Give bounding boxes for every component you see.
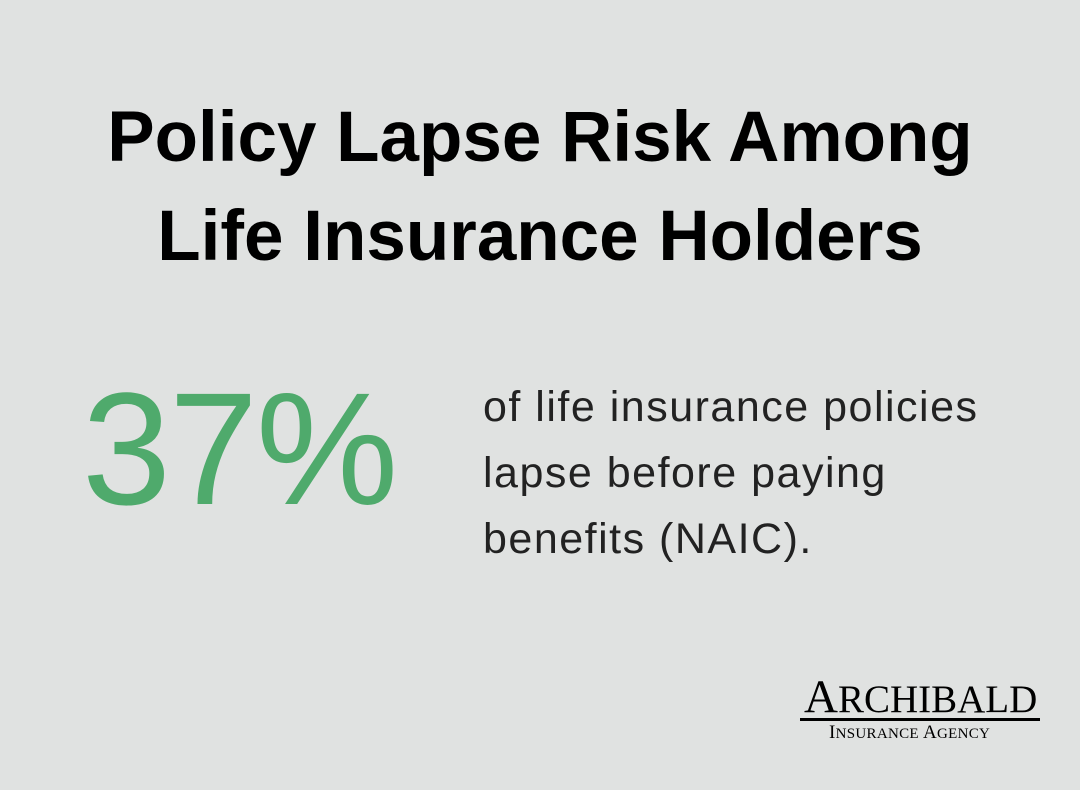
title — [107, 98, 973, 276]
title: Life Insurance Holders — [157, 197, 923, 276]
title: Policy Lapse Risk Among — [107, 98, 973, 177]
logo: Archibald Insurance Agency: ARCHIBALD — [804, 671, 1037, 723]
description text — [483, 383, 979, 563]
description text: of life insurance policies — [483, 383, 979, 431]
logo: Archibald Insurance Agency: INSURANCE AGENCY — [829, 722, 990, 743]
description text: lapse before paying — [483, 449, 887, 497]
statistic: 37%: 37% — [82, 359, 396, 538]
description text: benefits (NAIC). — [483, 515, 813, 563]
